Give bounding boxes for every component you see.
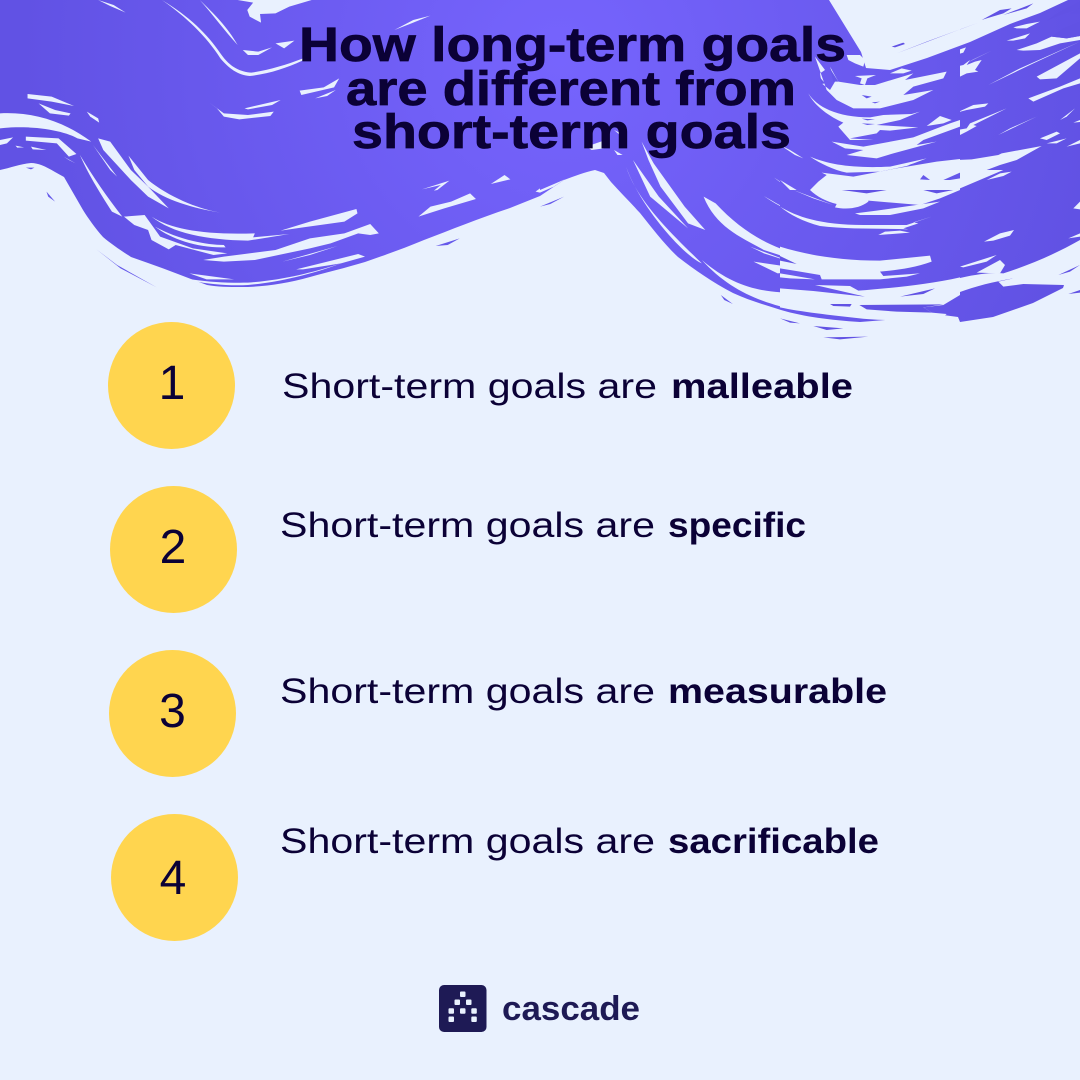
number badge 3 bbox=[109, 650, 236, 777]
item 2 text bbox=[280, 506, 806, 545]
number badge 1: 1 bbox=[159, 357, 185, 410]
item 2 text: specific bbox=[668, 506, 806, 545]
brush stroke banner bbox=[0, 0, 1080, 339]
number badge 2 bbox=[110, 486, 237, 613]
wordmark: cascade bbox=[502, 990, 640, 1028]
stray paint slivers bbox=[26, 2, 1080, 339]
number badge 4: 4 bbox=[160, 852, 186, 905]
item 1 text: Short-term goals are bbox=[282, 367, 657, 406]
item 2 text: Short-term goals are bbox=[280, 506, 655, 545]
item 3 bbox=[109, 650, 887, 777]
item 2 bbox=[110, 486, 806, 613]
item 3 text: measurable bbox=[668, 672, 887, 711]
number badge 4 bbox=[111, 814, 238, 941]
icon: cascade mark bbox=[439, 985, 486, 1032]
item 1 text: malleable bbox=[671, 367, 853, 406]
number badge 1 bbox=[108, 322, 235, 449]
item 4 text: sacrificable bbox=[668, 822, 879, 861]
title bbox=[299, 19, 846, 159]
item 3 text bbox=[280, 672, 887, 711]
item 4 text bbox=[280, 822, 879, 861]
mid right streaks, lower bbox=[780, 190, 960, 320]
number badge 3: 3 bbox=[159, 685, 186, 738]
item 3 text: Short-term goals are bbox=[280, 672, 655, 711]
item 4 text: Short-term goals are bbox=[280, 822, 655, 861]
number badge 2: 2 bbox=[160, 521, 186, 574]
far right light streaks bbox=[960, 22, 1080, 292]
cascade logo bbox=[439, 985, 640, 1032]
left half streaks bbox=[0, 0, 540, 285]
title: are different from bbox=[346, 63, 796, 116]
item 1 text bbox=[282, 367, 853, 406]
item 4 bbox=[111, 814, 879, 941]
title: short-term goals bbox=[352, 106, 791, 159]
item 1 bbox=[108, 322, 853, 449]
centre right streaks bbox=[540, 130, 780, 306]
title: How long-term goals bbox=[299, 19, 846, 72]
mid right streaks, upper bbox=[780, 55, 960, 190]
